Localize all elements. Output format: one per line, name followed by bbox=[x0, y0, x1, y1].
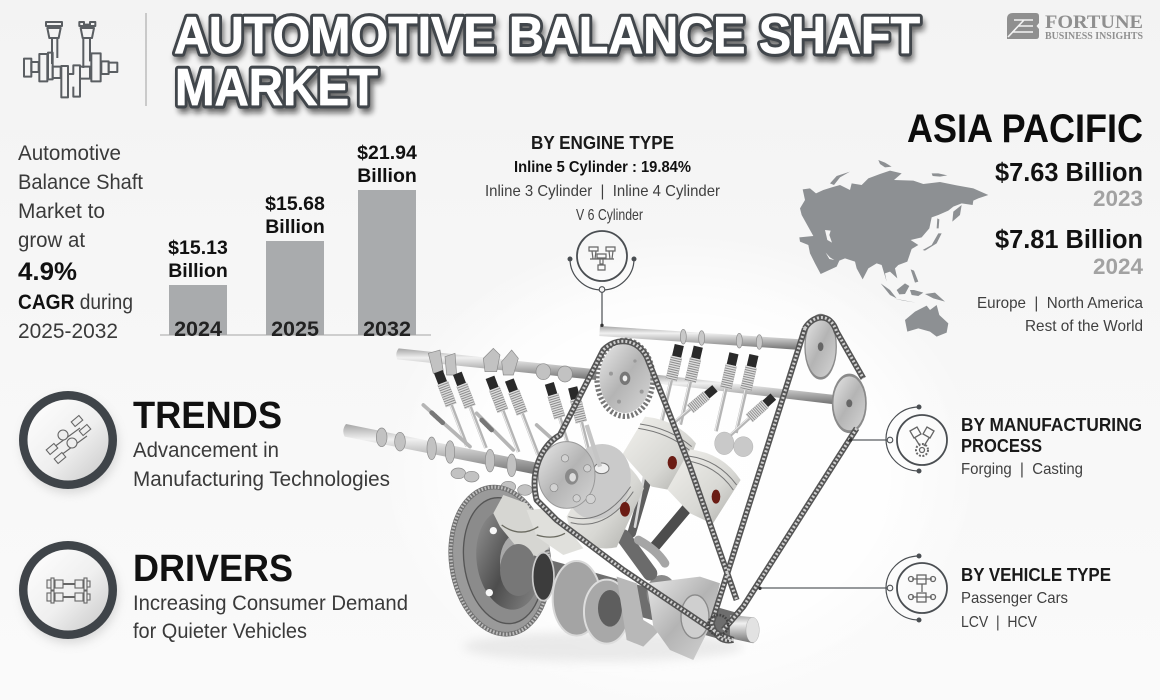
icon: engine type connector bbox=[568, 231, 636, 325]
panel: by engine type: BY ENGINE TYPE bbox=[531, 133, 674, 153]
panel: Asia Pacific: 2023 bbox=[1093, 186, 1143, 211]
spark plugs bbox=[423, 405, 553, 450]
title: AUTOMOTIVE BALANCE SHAFT bbox=[174, 7, 920, 65]
panel: trends: Advancement in bbox=[133, 439, 279, 462]
title: MARKET bbox=[175, 59, 378, 117]
panel: Asia Pacific: $7.81 Billion bbox=[995, 226, 1143, 254]
front sprocket bbox=[538, 442, 595, 508]
connecting rods bbox=[623, 477, 688, 573]
panel: Asia Pacific bbox=[907, 107, 1144, 335]
panel: trends: Manufacturing Technologies bbox=[133, 468, 390, 491]
panel: by engine type: Inline 3 Cylinder | Inline 4 Cylinder bbox=[485, 183, 721, 200]
crankshaft bbox=[500, 544, 759, 660]
panel: by vehicle type: Passenger Cars bbox=[961, 590, 1068, 607]
panel: Asia Pacific: $7.63 Billion bbox=[995, 159, 1143, 187]
left upper camshaft bbox=[396, 348, 597, 382]
panel: Asia Pacific: Europe | North America bbox=[977, 295, 1143, 312]
CAGR text block: Balance Shaft bbox=[18, 171, 143, 194]
bar chart: Billion bbox=[357, 165, 417, 187]
panel: by vehicle type: LCV | HCV bbox=[961, 614, 1037, 631]
connector dots bbox=[600, 324, 852, 590]
divider bbox=[145, 13, 147, 106]
bar chart: $15.13 bbox=[168, 237, 228, 259]
lower pistons bbox=[493, 495, 583, 558]
panel: drivers: DRIVERS bbox=[133, 548, 293, 590]
panel: by vehicle type bbox=[961, 565, 1111, 631]
bar chart: Billion bbox=[168, 260, 228, 282]
CAGR text block: 4.9% bbox=[18, 258, 77, 286]
logo: Fortune Business Insights bbox=[1007, 12, 1143, 42]
panel: drivers bbox=[19, 541, 408, 643]
icon: drivers badge bbox=[19, 541, 118, 643]
CAGR text block: 2025-2032 bbox=[18, 320, 118, 343]
bar chart: $15.68 bbox=[265, 193, 325, 215]
top right sprocket bbox=[805, 315, 836, 378]
panel: by vehicle type: BY VEHICLE TYPE bbox=[961, 565, 1111, 585]
CAGR text block: CAGR during bbox=[18, 291, 133, 314]
logo: Fortune Business Insights: BUSINESS INSIGHTS bbox=[1045, 31, 1143, 42]
bar chart bbox=[160, 142, 431, 341]
CAGR text block bbox=[18, 142, 143, 343]
panel: by manufacturing process: PROCESS bbox=[961, 436, 1042, 456]
panel: drivers: Increasing Consumer Demand bbox=[133, 592, 408, 615]
title bbox=[174, 7, 922, 122]
bar chart: 2024 bbox=[174, 317, 222, 341]
title: AUTOMOTIVE BALANCE SHAFT bbox=[174, 7, 920, 65]
left lower camshaft bbox=[343, 424, 540, 495]
title: AUTOMOTIVE BALANCE SHAFT bbox=[176, 12, 922, 70]
title: MARKET bbox=[175, 59, 378, 117]
panel: trends bbox=[19, 391, 390, 493]
back pistons bbox=[623, 417, 741, 524]
CAGR text block: Market to bbox=[18, 200, 105, 223]
bar chart: Billion bbox=[265, 216, 325, 238]
panel: Asia Pacific: Rest of the World bbox=[1025, 318, 1143, 335]
icon: vehicle type bbox=[886, 554, 947, 622]
flywheel bbox=[442, 481, 558, 641]
map: Asia Pacific bbox=[799, 160, 988, 337]
panel: by manufacturing process: BY MANUFACTURING bbox=[961, 415, 1142, 435]
icon: trends badge bbox=[19, 391, 118, 493]
engine illustration bbox=[343, 315, 866, 662]
icon: manufacturing process bbox=[886, 405, 947, 473]
CAGR text block: grow at bbox=[18, 229, 85, 252]
bar chart: 2032 bbox=[363, 317, 411, 341]
panel: drivers: for Quieter Vehicles bbox=[133, 620, 307, 643]
left valves bbox=[433, 370, 597, 466]
panel: by engine type bbox=[485, 133, 721, 224]
panel: by manufacturing process bbox=[961, 415, 1142, 478]
panel: by manufacturing process: Forging | Casting bbox=[961, 461, 1083, 478]
timing chains bbox=[535, 317, 863, 640]
title: MARKET bbox=[178, 64, 381, 122]
right valves bbox=[656, 344, 777, 457]
middle right camshaft bbox=[650, 374, 835, 404]
center sprocket bbox=[597, 340, 653, 416]
panel: Asia Pacific: 2024 bbox=[1093, 254, 1144, 279]
panel: by engine type: Inline 5 Cylinder : 19.84% bbox=[514, 159, 691, 176]
panel: by engine type: V 6 Cylinder bbox=[576, 207, 644, 224]
bar chart: $21.94 bbox=[357, 142, 417, 164]
top right camshaft bbox=[599, 326, 802, 350]
CAGR text block: Automotive bbox=[18, 142, 121, 165]
panel: trends: TRENDS bbox=[133, 395, 282, 437]
logo: Fortune Business Insights: FORTUNE bbox=[1045, 12, 1143, 33]
right sprocket bbox=[833, 375, 866, 432]
front piston bbox=[555, 425, 644, 549]
bar chart: 2025 bbox=[271, 317, 319, 341]
connectors: right-hand lines bbox=[760, 440, 887, 588]
icon: crankshaft with pistons bbox=[24, 22, 117, 97]
